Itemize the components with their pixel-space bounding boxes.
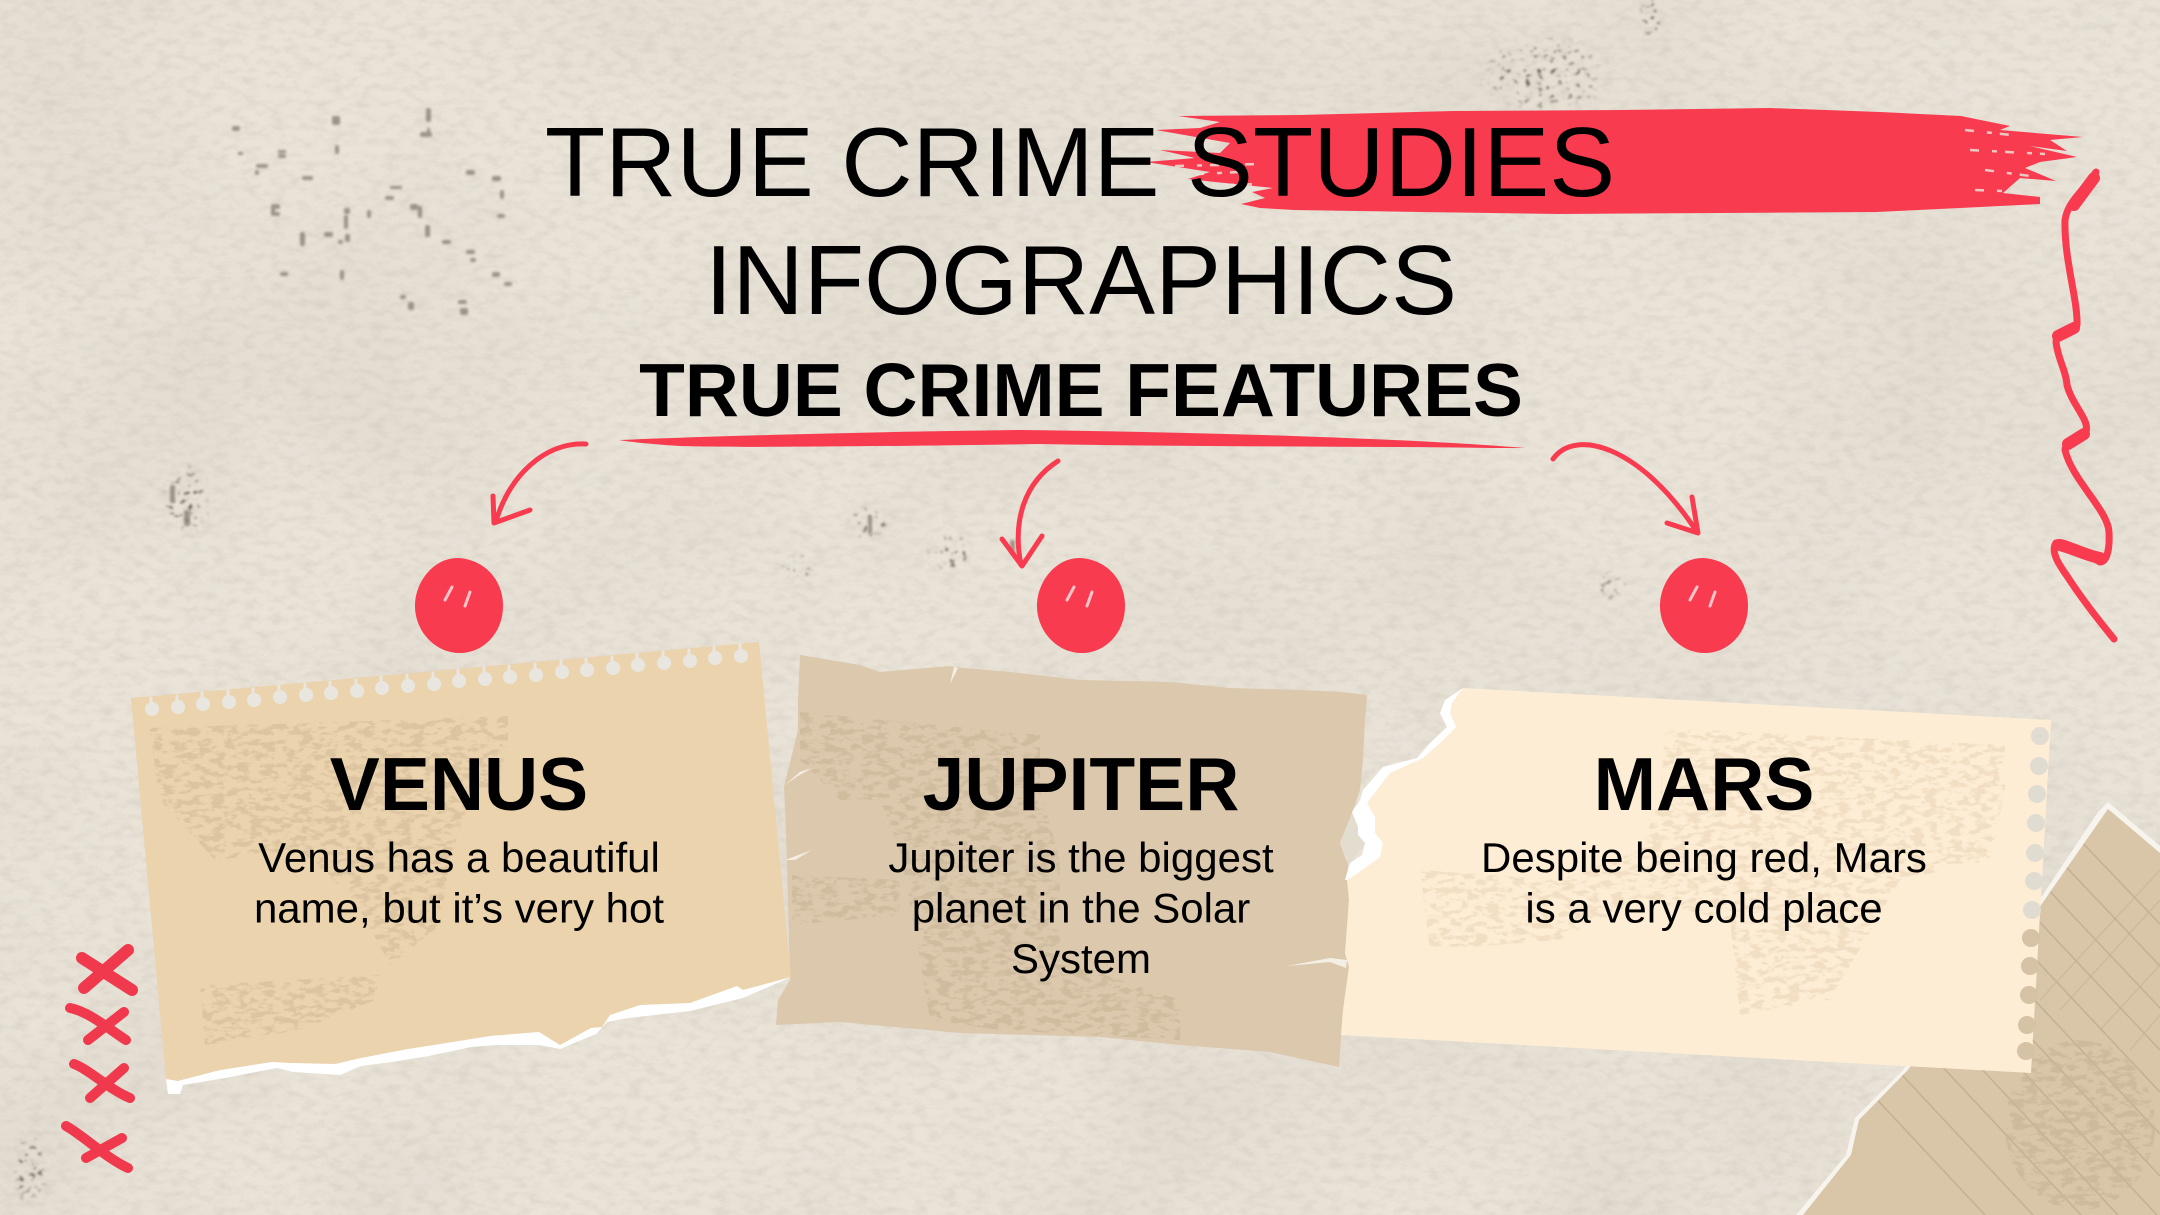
text: Jupiter: Jupiter is the biggest	[888, 834, 1274, 881]
text: Mars: MARS	[1594, 742, 1814, 826]
panel: Venus note	[131, 642, 791, 1094]
tear marks	[785, 667, 1347, 968]
sheet	[776, 655, 1367, 1067]
text: Jupiter: JUPITER	[923, 742, 1239, 826]
brush stroke behind title	[1146, 108, 2083, 214]
text: Jupiter: System	[1011, 935, 1151, 982]
arrow: to Jupiter	[1002, 461, 1058, 566]
dot: Jupiter	[1037, 558, 1125, 653]
perforations	[151, 645, 741, 709]
arrow: to Venus	[493, 444, 586, 523]
subtitle: TRUE CRIME FEATURES	[639, 348, 1523, 432]
title: INFOGRAPHICS	[705, 225, 1457, 335]
text: Venus	[254, 742, 664, 932]
red squiggle	[2054, 172, 2114, 639]
stain	[149, 716, 508, 1045]
panel: Mars note	[1340, 688, 2051, 1073]
red x marks	[66, 950, 132, 1168]
torn white edge	[166, 977, 791, 1094]
stain	[1420, 728, 2005, 1015]
title	[545, 107, 1615, 335]
subtitle underline	[619, 430, 1525, 448]
x mark 4	[66, 1126, 128, 1168]
text: Mars: is a very cold place	[1525, 884, 1883, 932]
white torn rim	[1345, 688, 1463, 880]
x mark 3	[74, 1064, 130, 1098]
stain	[792, 712, 1180, 1040]
arrow: to Mars	[1553, 445, 1698, 533]
x mark 2	[70, 1008, 126, 1040]
side perforations	[2017, 727, 2049, 1060]
torn lined note corner	[1796, 802, 2160, 1215]
sheet	[131, 642, 791, 1081]
panel: Jupiter note	[776, 655, 1367, 1067]
text: Venus: Venus has a beautiful	[258, 834, 660, 881]
grey tear gap	[1340, 813, 1366, 863]
text: Jupiter: planet in the Solar	[912, 884, 1250, 932]
title: TRUE CRIME STUDIES	[545, 107, 1615, 217]
sheet	[1341, 688, 2051, 1073]
text: Venus: VENUS	[330, 742, 588, 826]
text: Jupiter	[888, 742, 1274, 982]
dot: Venus	[415, 558, 503, 653]
text: Mars: Despite being red, Mars	[1481, 834, 1927, 881]
text: Venus: name, but it’s very hot	[254, 884, 664, 932]
x mark 1	[82, 950, 132, 990]
dot: Mars	[1660, 558, 1748, 653]
text: Mars	[1481, 742, 1927, 932]
